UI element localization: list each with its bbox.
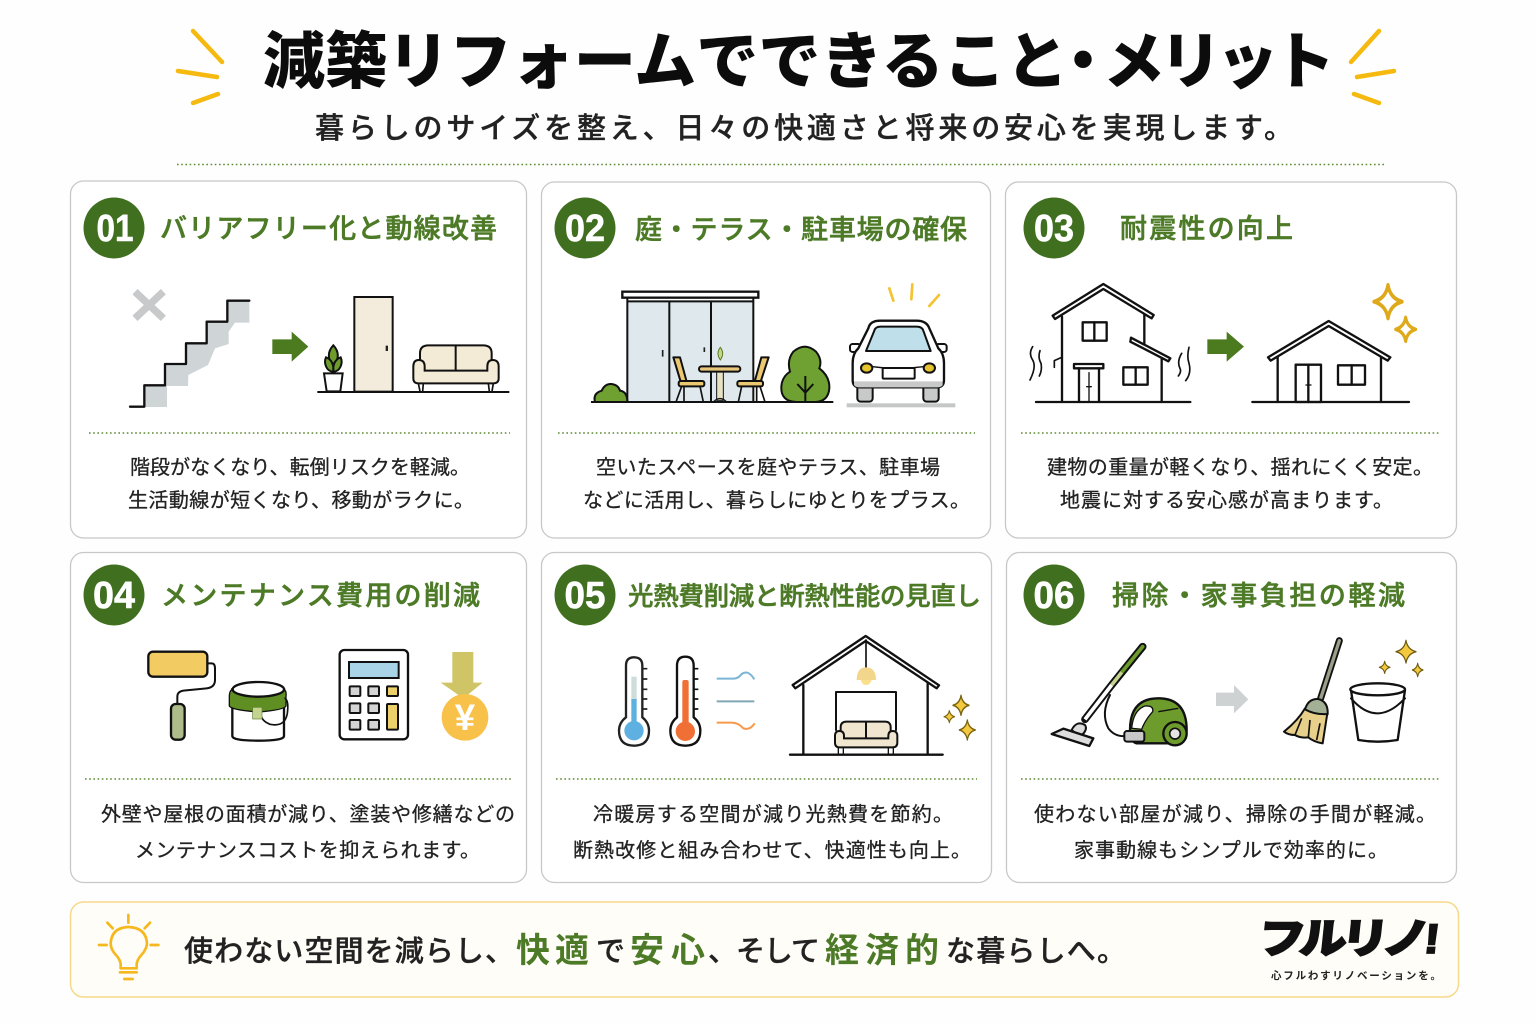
panel: 01 barrier free	[70, 181, 526, 538]
icon: light bulb	[99, 915, 158, 979]
body text 02: などに活用し、暮らしにゆとりをプラス。	[583, 489, 970, 512]
heading 02: 庭・テラス・駐車場の確保	[635, 215, 967, 245]
body text 01: 生活動線が短くなり、移動がラクに。	[128, 489, 474, 512]
body text 04	[101, 803, 515, 862]
illustration: paint, calculator, yen: ¥	[455, 697, 476, 738]
heading 05: 光熱費削減と断熱性能の見直し	[628, 583, 981, 611]
title: 減築リフォームでできること	[263, 28, 1068, 97]
number badge 02: 02	[565, 208, 605, 250]
logo	[1256, 917, 1442, 982]
body text 06: 家事動線もシンプルで効率的に。	[1074, 839, 1388, 862]
heading 01: バリアフリー化と動線改善	[160, 214, 497, 244]
summary message: 安心	[630, 932, 705, 970]
icon: left title sparkle lines	[178, 31, 222, 103]
panel: 05 energy and insulation	[542, 552, 992, 882]
illustration: thermometers and insulated house	[619, 636, 975, 755]
title: ・	[1052, 28, 1114, 97]
number badge 04: 04	[93, 575, 135, 617]
summary message: で	[596, 936, 625, 968]
number badge 01	[84, 198, 144, 258]
panel: 06 cleaning and housework	[1006, 552, 1456, 882]
icon: right title sparkle lines	[1351, 31, 1394, 103]
illustration: lighter house	[1030, 284, 1416, 402]
heading 06: 掃除・家事負担の軽減	[1112, 581, 1405, 611]
number badge 06	[1024, 564, 1084, 626]
body text 01	[128, 456, 474, 512]
body text 05: 断熱改修と組み合わせて、快適性も向上。	[573, 839, 971, 862]
number badge 05	[554, 564, 616, 626]
number badge 03	[1024, 198, 1084, 258]
number badge 05: 05	[564, 575, 606, 617]
panel: 02 garden terrace parking	[542, 182, 990, 538]
summary message: 経済的	[825, 932, 939, 970]
body text 02	[583, 456, 970, 512]
subtitle: 暮らしのサイズを整え、日々の快適さと将来の安心を実現します。	[315, 112, 1293, 145]
logo: 心フルわすリノベーションを。	[1271, 969, 1441, 982]
summary message: な暮らしへ。	[946, 935, 1126, 968]
illustration: terrace and car	[591, 284, 955, 407]
panel: 04 maintenance cost	[70, 552, 526, 882]
summary message: 、そして	[708, 936, 820, 968]
body text 03: 地震に対する安心感が高まります。	[1060, 489, 1393, 512]
number badge 06: 06	[1034, 575, 1074, 617]
number badge 02	[554, 198, 616, 258]
title: メリット	[1103, 28, 1335, 97]
body text 04: 外壁や屋根の面積が減り、塗装や修繕などの	[101, 803, 515, 826]
heading 04: メンテナンス費用の削減	[161, 581, 480, 611]
panel: bottom summary banner	[70, 902, 1458, 997]
body text 05: 冷暖房する空間が減り光熱費を節約。	[593, 803, 953, 826]
logo: フルリノ!	[1256, 917, 1442, 962]
summary message	[184, 932, 1126, 970]
illustration: vacuum to broom and bucket	[1052, 640, 1423, 746]
illustration: paint, calculator, yen	[148, 650, 488, 741]
number badge 03: 03	[1034, 208, 1074, 250]
body text 01: 階段がなくなり、転倒リスクを軽減。	[130, 456, 470, 479]
body text 02: 空いたスペースを庭やテラス、駐車場	[596, 456, 940, 479]
panel: 03 earthquake resistance	[1006, 182, 1456, 538]
summary message: 快適	[516, 932, 589, 970]
illustration: stairs to flat room	[130, 292, 509, 407]
summary message: 使わない空間を減らし、	[184, 935, 514, 968]
number badge 01: 01	[96, 208, 134, 250]
body text 05	[573, 803, 971, 862]
heading 03: 耐震性の向上	[1120, 214, 1293, 244]
body text 03	[1047, 456, 1433, 512]
body text 06: 使わない部屋が減り、掃除の手間が軽減。	[1034, 803, 1436, 826]
body text 03: 建物の重量が軽くなり、揺れにくく安定。	[1047, 456, 1433, 479]
body text 06	[1034, 803, 1436, 862]
body text 04: メンテナンスコストを抑えられます。	[135, 839, 480, 862]
number badge 04	[84, 564, 144, 626]
